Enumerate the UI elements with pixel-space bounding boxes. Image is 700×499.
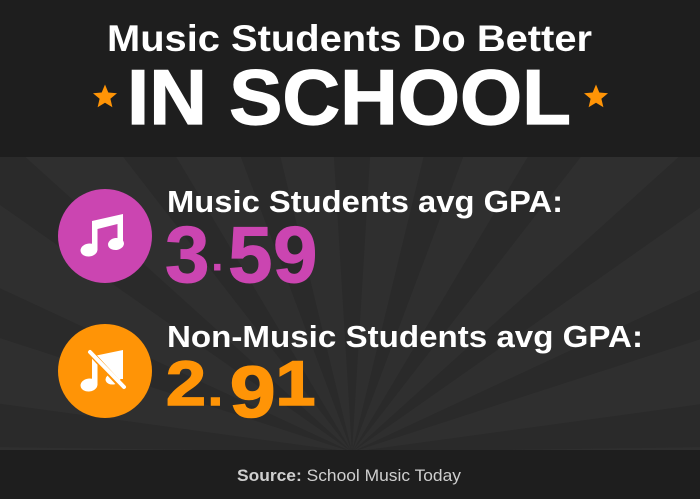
text: source credit: Source: School Music Today (237, 467, 462, 485)
panel: sunburst background (0, 157, 700, 450)
number: non-music students GPA value: 1 (275, 349, 315, 419)
icon: left star (93, 84, 117, 107)
number: non-music students GPA value: 9 (230, 353, 275, 433)
number: music students GPA value: 3 (165, 210, 210, 299)
label: non-music students GPA: Non-Music Students avg GPA: (167, 319, 643, 354)
number: music students GPA value: 5 (228, 210, 272, 299)
label: music students GPA: Music Students avg GPA: (167, 184, 563, 219)
panel: header band (0, 0, 700, 157)
icon: music note in pink circle (58, 189, 152, 283)
icon: right star (584, 84, 608, 107)
number: music students GPA value: 9 (273, 210, 318, 299)
heading: title line two: IN SCHOOL (127, 53, 571, 141)
icon: crossed music note in orange circle (58, 324, 152, 418)
number: non-music students GPA value: . (208, 364, 223, 415)
number: music students GPA value: . (212, 237, 223, 279)
panel: footer band (0, 450, 700, 499)
number: non-music students GPA value: 2 (166, 349, 206, 419)
heading: title line one: Music Students Do Better (107, 18, 592, 59)
